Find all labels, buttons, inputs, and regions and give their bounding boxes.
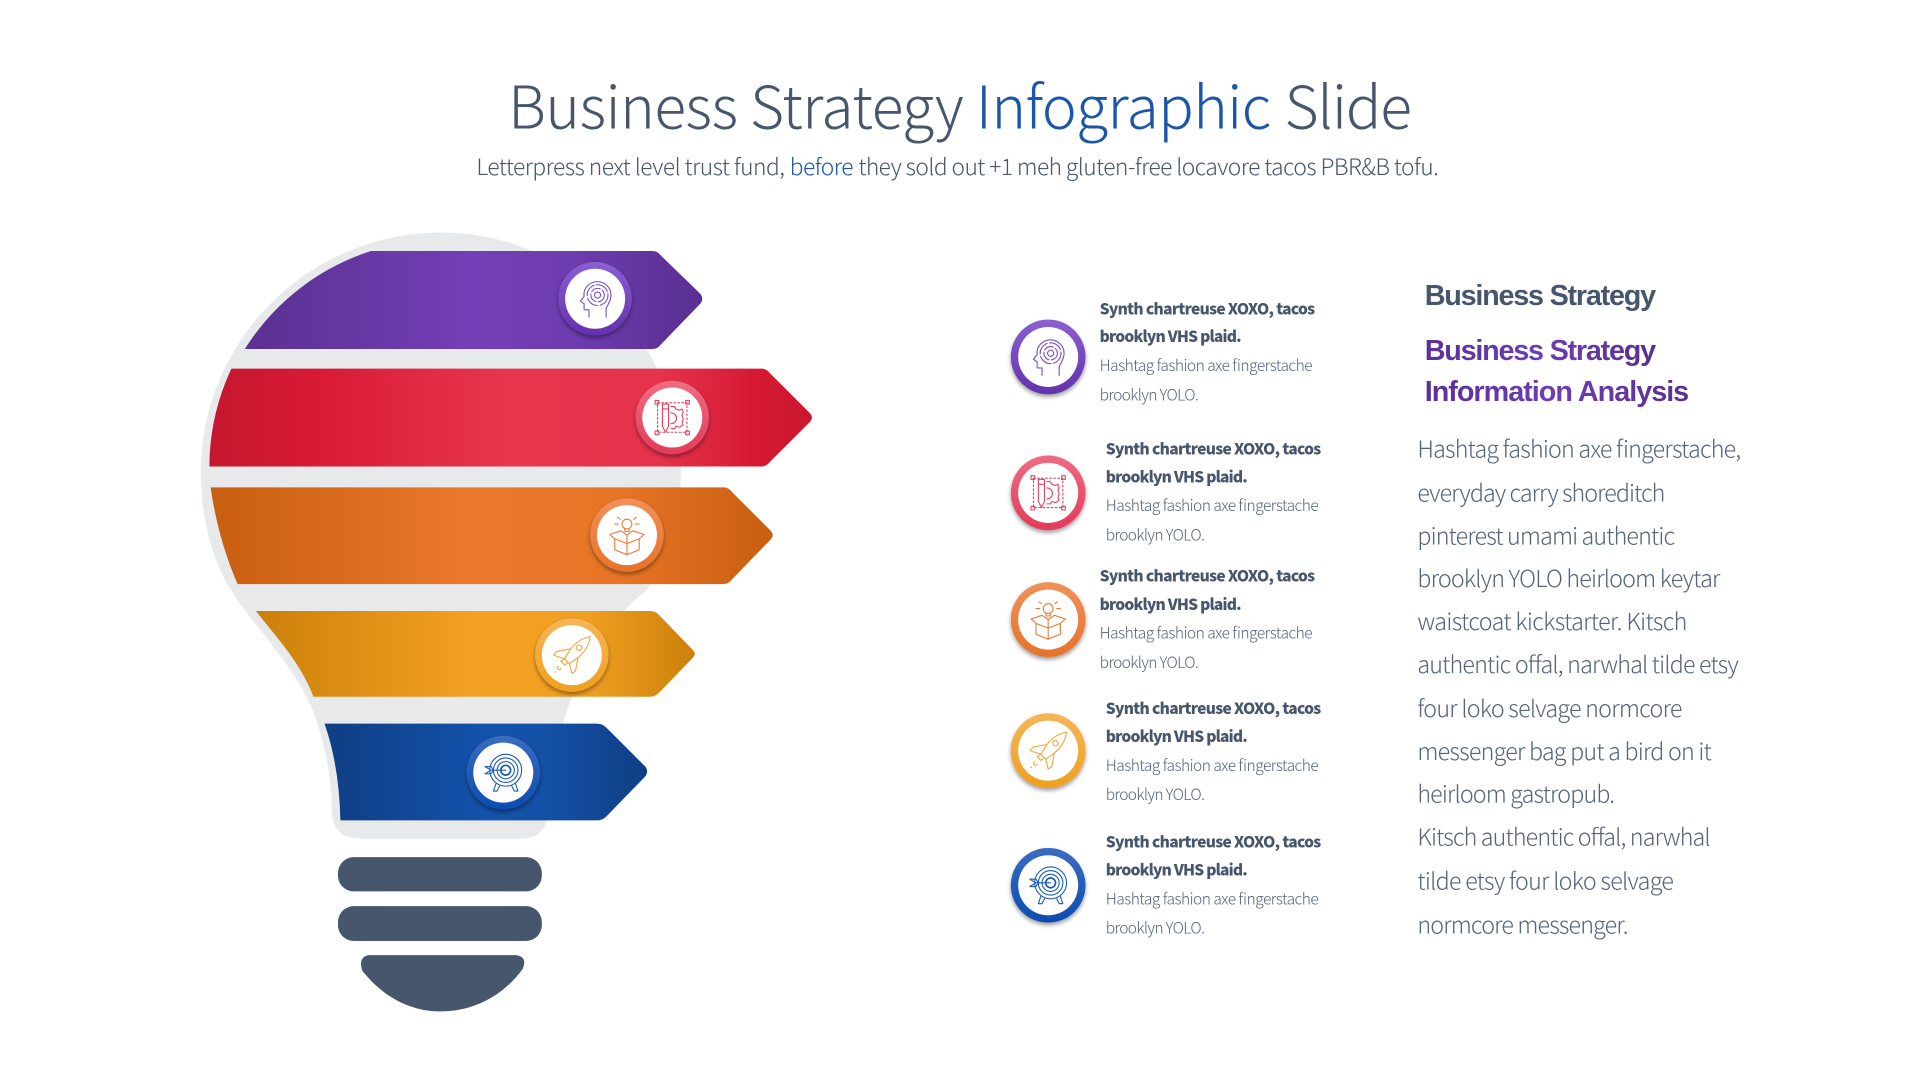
text block 3: Synth chartreuse XOXO, tacos: [1100, 565, 1315, 587]
body paragraph: authentic offal, narwhal tilde etsy: [1417, 646, 1739, 680]
text block 3: brooklyn YOLO.: [1100, 651, 1199, 673]
heading: information analysis: Business Strategy: [1425, 335, 1656, 367]
bulb base bar 2: [338, 906, 542, 941]
icon: target: [1011, 848, 1086, 923]
band icon: rocket: [535, 618, 609, 692]
bulb base bar 1: [338, 857, 542, 891]
body paragraph: Kitsch authentic offal, narwhal: [1417, 819, 1711, 853]
bulb base cap: [361, 955, 524, 1011]
band icon: head maze: [558, 262, 632, 336]
list item 5: [1011, 830, 1321, 939]
text block 4: [1106, 697, 1321, 805]
text block 1: brooklyn YOLO.: [1100, 383, 1199, 405]
band: blue arrow: [324, 724, 647, 820]
subtitle: [476, 149, 1439, 182]
body paragraph: [1417, 430, 1741, 941]
body paragraph: brooklyn YOLO heirloom keytar: [1417, 560, 1721, 594]
text block 2: Hashtag fashion axe fingerstache: [1106, 494, 1319, 516]
icon: rocket: [1011, 713, 1086, 788]
text block 1: Synth chartreuse XOXO, tacos: [1100, 298, 1315, 320]
text block 5: [1106, 830, 1321, 939]
heading: business strategy: Business Strategy: [1425, 280, 1656, 312]
light bulb graphic: [201, 233, 812, 1011]
subtitle: they sold out +1 meh gluten-free locavore tacos PBR&B tofu.: [858, 149, 1439, 182]
icon: design tool: [1011, 456, 1086, 530]
body paragraph: messenger bag put a bird on it: [1417, 733, 1712, 767]
body paragraph: four loko selvage normcore: [1417, 690, 1682, 724]
title: Business Strategy: [508, 61, 964, 146]
heading: information analysis: [1425, 335, 1689, 408]
body paragraph: normcore messenger.: [1417, 907, 1629, 941]
band icon: design tool: [636, 381, 709, 454]
subtitle: before: [790, 149, 853, 182]
text block 3: Hashtag fashion axe fingerstache: [1100, 622, 1313, 644]
text block 1: brooklyn VHS plaid.: [1100, 325, 1242, 347]
text block 5: brooklyn YOLO.: [1106, 917, 1205, 939]
title: Slide: [1284, 61, 1412, 146]
body paragraph: tilde etsy four loko selvage: [1417, 863, 1674, 897]
list item 2: [1011, 437, 1321, 546]
band: purple arrow: [245, 251, 702, 349]
subtitle: Letterpress next level trust fund,: [476, 149, 785, 182]
heading: information analysis: Information Analysis: [1425, 376, 1689, 408]
body paragraph: pinterest umami authentic: [1417, 517, 1675, 551]
text block 4: Synth chartreuse XOXO, tacos: [1106, 697, 1321, 719]
body paragraph: Hashtag fashion axe fingerstache,: [1417, 430, 1741, 464]
icon: idea box: [1011, 582, 1086, 657]
band: red arrow: [209, 369, 812, 467]
text block 4: brooklyn VHS plaid.: [1106, 725, 1248, 747]
text block 2: [1106, 437, 1321, 546]
body paragraph: waistcoat kickstarter. Kitsch: [1417, 603, 1687, 637]
band icon: target: [467, 736, 540, 809]
text block 5: Hashtag fashion axe fingerstache: [1106, 887, 1319, 909]
icon: head maze: [1011, 320, 1086, 394]
text block 4: brooklyn YOLO.: [1106, 783, 1205, 805]
text block 2: Synth chartreuse XOXO, tacos: [1106, 437, 1321, 459]
list item 3: [1011, 565, 1315, 673]
bulb glass silhouette: [201, 233, 681, 839]
band: orange arrow: [211, 487, 773, 584]
text block 1: Hashtag fashion axe fingerstache: [1100, 354, 1313, 376]
text block 4: Hashtag fashion axe fingerstache: [1106, 754, 1319, 776]
text block 2: brooklyn YOLO.: [1106, 524, 1205, 546]
text block 1: [1100, 298, 1315, 405]
list item 1: [1011, 298, 1315, 405]
text block 3: brooklyn VHS plaid.: [1100, 593, 1242, 615]
body paragraph: everyday carry shoreditch: [1417, 474, 1665, 508]
text block 2: brooklyn VHS plaid.: [1106, 465, 1248, 487]
band: yellow arrow: [256, 611, 695, 697]
text block 3: [1100, 565, 1315, 673]
text block 5: brooklyn VHS plaid.: [1106, 859, 1248, 881]
band icon: idea box: [590, 498, 664, 572]
text block 5: Synth chartreuse XOXO, tacos: [1106, 830, 1321, 852]
body paragraph: heirloom gastropub.: [1417, 776, 1615, 810]
title: [508, 61, 1412, 146]
title: Infographic: [976, 61, 1271, 146]
list item 4: [1011, 697, 1321, 805]
